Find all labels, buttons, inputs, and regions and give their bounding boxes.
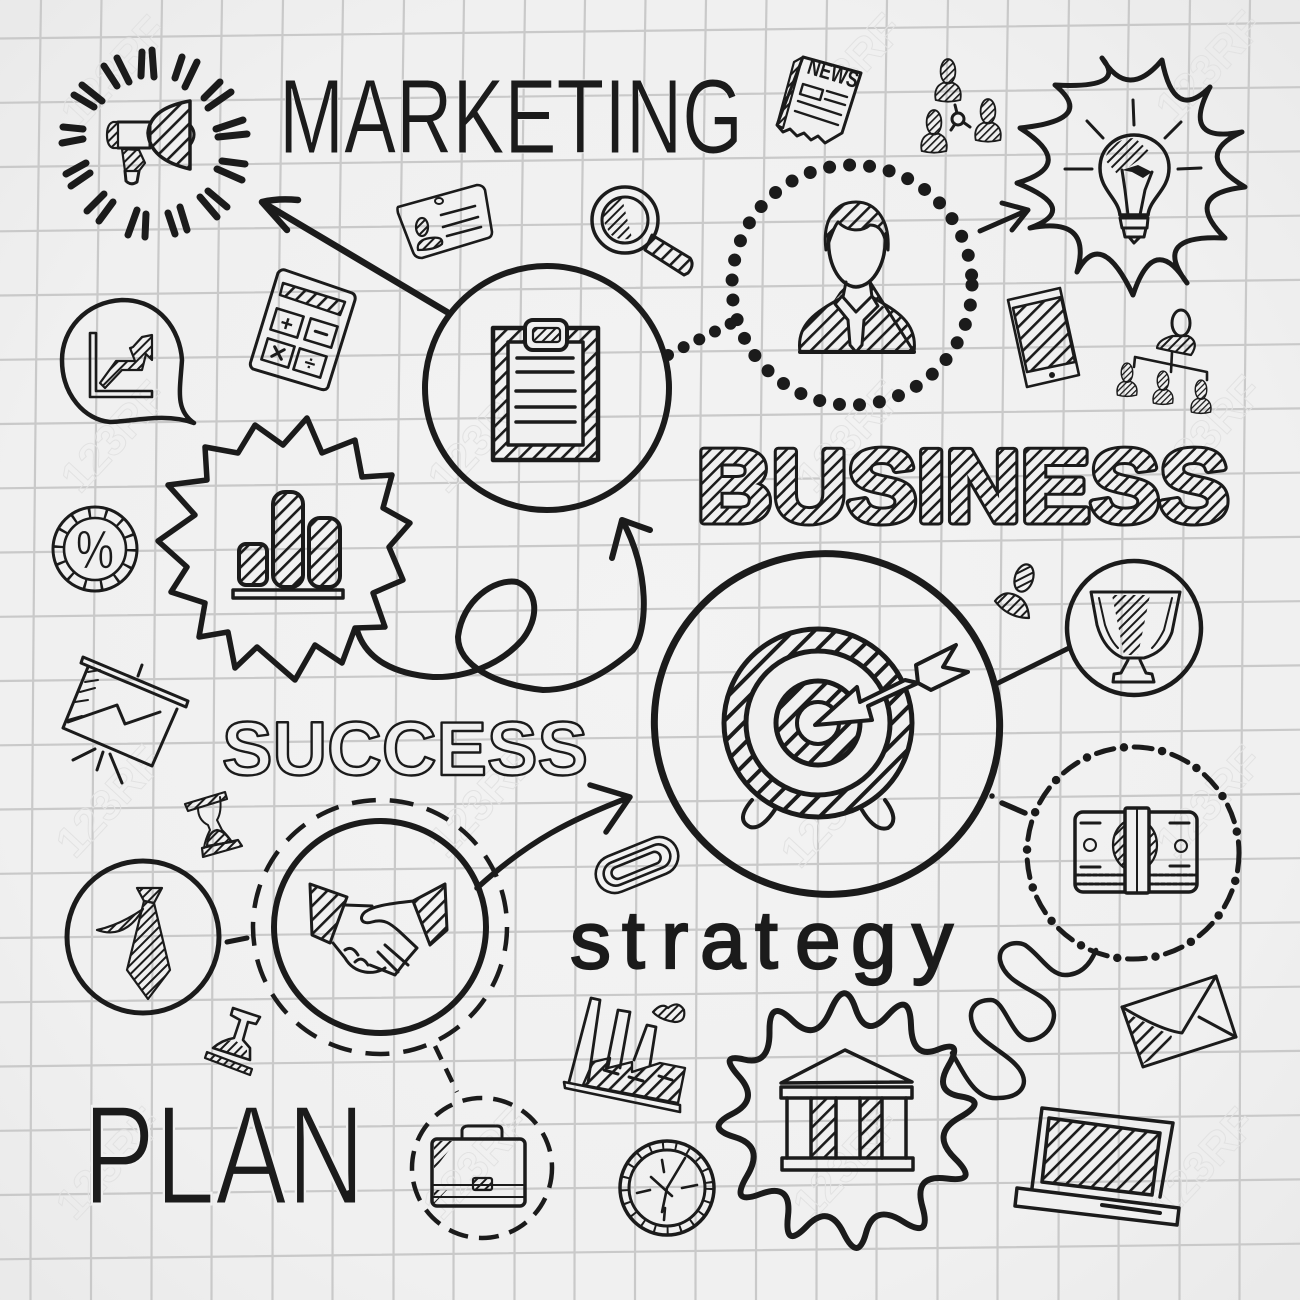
title: MARKETING: MARKETING bbox=[279, 58, 743, 176]
circle with trophy bbox=[1067, 561, 1201, 695]
icon: org chart bbox=[1117, 310, 1211, 413]
icon: people network bbox=[921, 59, 1001, 153]
icon: clipboard bbox=[493, 320, 598, 460]
watermarks: 123RF bbox=[1146, 2, 1272, 132]
icon: businessman bbox=[799, 202, 914, 352]
dash-dot circle around money bbox=[1027, 747, 1239, 959]
icon: envelope bbox=[1122, 976, 1236, 1067]
icon: smartphone bbox=[1008, 288, 1079, 387]
icon: calculator: + bbox=[277, 310, 297, 337]
dotted circle around person bbox=[732, 165, 972, 405]
arrow: handshake to target bbox=[477, 785, 630, 888]
dotted connector: clipboard to person bbox=[668, 320, 738, 355]
arrow: clipboard to marketing bbox=[262, 199, 447, 312]
icon: chess rook stamp bbox=[205, 1008, 260, 1075]
icon: clock bbox=[620, 1141, 714, 1235]
icon: percent coin: % bbox=[76, 520, 114, 580]
watermarks: 123RF bbox=[786, 5, 912, 135]
icon: newspaper bbox=[777, 53, 862, 143]
watermarks: 123RF bbox=[418, 737, 544, 867]
circle around target bbox=[606, 505, 1048, 943]
burst with bar chart bbox=[158, 418, 410, 680]
icon: megaphone with sunburst bbox=[62, 50, 247, 237]
icon: money stack bbox=[1075, 808, 1197, 893]
curly arrow: chart to clipboard bbox=[357, 520, 650, 690]
watermarks: 123RF bbox=[51, 372, 177, 502]
heading: BUSINESS: BUSINESS bbox=[697, 431, 1229, 543]
watermarks: 123RF bbox=[418, 372, 544, 502]
icon: presentation board bbox=[63, 657, 188, 783]
watermarks: 123RF bbox=[46, 737, 172, 867]
circle around handshake bbox=[274, 821, 486, 1033]
wavy connector: gear to money bbox=[952, 943, 1096, 1098]
dashed circle with briefcase bbox=[412, 1098, 552, 1238]
speech bubble with growth chart bbox=[62, 300, 194, 423]
icon: hourglass bbox=[185, 792, 242, 857]
dashed circle around handshake bbox=[253, 800, 507, 1054]
watermarks: 123RF bbox=[51, 7, 177, 137]
icon: target with arrow bbox=[724, 629, 968, 829]
gear with bank bbox=[719, 993, 975, 1248]
watermarks: 123RF bbox=[46, 1099, 172, 1229]
dashes: handshake to briefcase bbox=[435, 1046, 457, 1092]
connector: target to trophy bbox=[994, 648, 1069, 685]
watermarks: 123RF bbox=[786, 372, 912, 502]
watermarks: 123RF bbox=[783, 1099, 909, 1229]
icon: paperclip bbox=[590, 831, 684, 899]
watermarks: 123RF bbox=[1146, 367, 1272, 497]
icon: calculator: ÷ bbox=[301, 352, 318, 376]
icon: laptop bbox=[1015, 1108, 1179, 1225]
watermarks: 123RF bbox=[1146, 737, 1272, 867]
icon: tie in circle bbox=[67, 861, 219, 1013]
icon: calculator bbox=[250, 270, 355, 390]
dash-dot connector: target to money bbox=[992, 796, 1025, 813]
heading: PLAN: PLAN bbox=[83, 1076, 365, 1235]
circle around clipboard bbox=[425, 266, 669, 510]
icon: magnifier bbox=[592, 187, 692, 275]
dash: tie to handshake bbox=[227, 938, 247, 942]
icon: ID card bbox=[398, 185, 492, 258]
heading: strategy: strategy bbox=[570, 895, 953, 986]
watermarks: 123RF bbox=[1139, 1099, 1265, 1229]
icon: percent coin bbox=[53, 507, 137, 591]
heading: BUSINESS: BUSINESS bbox=[697, 431, 1229, 543]
icon: two people bbox=[995, 562, 1037, 618]
icon: factory bbox=[564, 998, 685, 1112]
icon: handshake bbox=[310, 884, 447, 975]
heading: SUCCESS: SUCCESS bbox=[222, 707, 588, 792]
icon: newspaper: NEWS bbox=[805, 53, 862, 93]
watermarks: 123RF bbox=[771, 747, 897, 877]
arrow: person to bulb bbox=[980, 203, 1028, 231]
icon: light bulb in burst bbox=[1017, 58, 1245, 295]
watermarks: 123RF bbox=[413, 1099, 539, 1229]
